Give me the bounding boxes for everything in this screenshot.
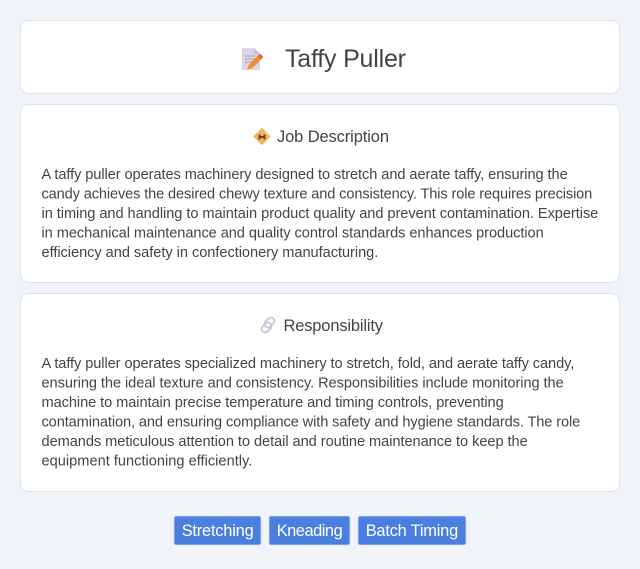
- text block: responsibility: A taffy puller operates specialized machinery to stretch, fold, and aerate taffy candy,: [42, 356, 574, 372]
- text block: responsibility: machine to maintain precise temperature and timing controls, preventing: [42, 395, 504, 411]
- text block: job description: A taffy puller operates machinery designed to stretch and aerate taffy, ensuring the: [42, 167, 568, 183]
- tag: batch timing: Batch Timing: [366, 522, 458, 540]
- tag: stretching: [174, 516, 261, 545]
- tag: stretching: Stretching: [182, 522, 254, 540]
- text block: job description: candy achieves the desired chewy texture and consistency. This role requires precision: [42, 186, 592, 202]
- text block: job description: efficiency and safety in confectionery manufacturing.: [42, 245, 378, 261]
- text block: responsibility: ensuring the ideal texture and consistency. Responsibilities include monitoring the: [42, 376, 564, 392]
- panel: title card: [20, 20, 620, 94]
- panel: job description: [20, 104, 620, 282]
- panel: responsibility: [20, 294, 620, 492]
- icon: chain link: [260, 316, 276, 334]
- icon: diamond sign: [254, 128, 270, 144]
- heading: job description: Job Description: [277, 128, 389, 146]
- tags: [174, 516, 466, 545]
- text block: responsibility: demands meticulous attention to detail and routine maintenance to keep the: [42, 434, 528, 450]
- title: Taffy Puller: [285, 45, 406, 73]
- text block: responsibility: equipment functioning efficiently.: [42, 454, 252, 470]
- icon: document with pencil: [242, 48, 263, 70]
- heading: responsibility: Responsibility: [284, 317, 384, 335]
- tag: kneading: [269, 516, 350, 545]
- tag: kneading: Kneading: [277, 522, 343, 540]
- text block: responsibility: contamination, and ensuring compliance with safety and hygiene standards. The role: [42, 414, 580, 430]
- tag: batch timing: [358, 516, 466, 545]
- text block: job description: [42, 167, 598, 261]
- text block: responsibility: [42, 356, 580, 470]
- text block: job description: in mechanical maintenance and quality control standards enhances production: [42, 226, 544, 242]
- text block: job description: in timing and handling to maintain product quality and prevent contamination. Expertise: [42, 206, 598, 222]
